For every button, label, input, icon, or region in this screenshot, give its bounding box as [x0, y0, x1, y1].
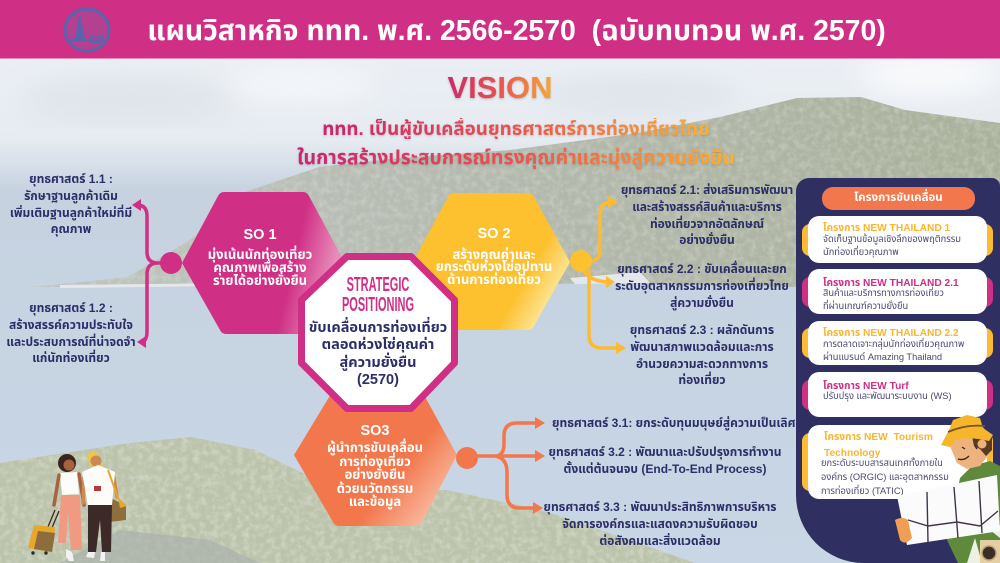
strategy text 2.1: และสร้างสรรค์สินค้าและบริการ	[632, 200, 782, 214]
strategy text 2.1	[621, 183, 793, 247]
face	[950, 436, 992, 469]
strategy text 2.1: ท่องเที่ยวจากอัตลักษณ์	[650, 217, 764, 231]
hand	[895, 518, 912, 543]
project card 5: การท่องเที่ยว (TATIC)	[821, 486, 904, 496]
text: สร้างคุณค่าและ	[452, 246, 536, 262]
project card 4: โครงการ NEW Turf	[823, 380, 909, 392]
strategy text 3.3: ยุทธศาสตร์ 3.3 : พัฒนาประสิทธิภาพการบริหาร	[543, 500, 777, 514]
vision statement: ททท. เป็นผู้ขับเคลื่อนยุทธศาสตร์การท่องเที่ยวไทย	[322, 118, 710, 139]
vision statement	[297, 118, 735, 170]
strategy text 2.3: ท่องเที่ยว	[678, 373, 726, 387]
strategy text 3.3	[543, 500, 777, 548]
strategy text 1.1: ยุทธศาสตร์ 1.1 :	[29, 172, 113, 186]
project card 5: Technology	[824, 448, 880, 458]
shirt	[947, 461, 1000, 563]
strategy text 2.3: อำนวยความสะดวกทางการ	[636, 357, 768, 371]
strategy text 1.2	[6, 301, 136, 365]
SO1 text: SO 1	[243, 227, 277, 243]
strategy text 2.3	[630, 323, 774, 387]
heading: VISION: VISION	[447, 70, 553, 105]
text: รายได้อย่างยั่งยืน	[213, 272, 307, 288]
hat	[941, 415, 993, 447]
icon: couple of travellers	[28, 452, 127, 561]
text: การท่องเที่ยว	[339, 454, 411, 468]
hexagon: SO1	[160, 192, 342, 334]
strategy text 2.2	[615, 260, 789, 310]
strategy text 2.3: พัฒนาสภาพแวดล้อมและการ	[630, 340, 774, 354]
suitcase	[45, 510, 59, 535]
logo	[64, 8, 110, 52]
connector arrows: SO3	[477, 417, 545, 514]
text: อย่างยั่งยืน	[345, 467, 405, 482]
connector node	[570, 250, 592, 272]
project card 5: โครงการ NEW Tourism	[824, 432, 933, 443]
project card 4: ปรับปรุง และพัฒนาระบบงาน (WS)	[823, 390, 952, 400]
strategic positioning text: สู่ความยั่งยืน	[340, 354, 416, 370]
SO3 text: SO3	[360, 423, 390, 439]
connector node	[456, 447, 478, 469]
text: มุ่งเน้นนักท่องเที่ยว	[208, 246, 312, 262]
project card 1: นักท่องเที่ยวคุณภาพ	[823, 247, 899, 257]
strategy text 1.1: เพิ่มเติมฐานลูกค้าใหม่ที่มี	[10, 206, 132, 220]
project card 5	[802, 425, 993, 499]
strategy text 3.3: จัดการองค์กรและแสดงความรับผิดชอบ	[562, 517, 758, 531]
text: คุณภาพเพื่อสร้าง	[213, 260, 306, 274]
strategy text 3.2	[549, 445, 781, 476]
strategy text 1.1	[10, 172, 132, 236]
hexagon: SO2	[416, 193, 592, 330]
strategic positioning heading: POSITIONING	[342, 294, 414, 316]
project card 3: การตลาดเจาะกลุ่มนักท่องเที่ยวคุณภาพ	[823, 338, 964, 348]
project card 2: สินค้าและบริการทางการท่องเที่ยว	[823, 288, 944, 298]
strategy text 1.2: ยุทธศาสตร์ 1.2 :	[29, 301, 113, 315]
project card 3: ผ่านแบรนด์ Amazing Thailand	[823, 352, 942, 362]
strategy text 1.2: แก่นักท่องเที่ยว	[32, 351, 110, 365]
strategy text 2.2: ระดับอุตสาหกรรมการท่องเที่ยวไทย	[615, 279, 789, 293]
project card 5: องค์กร (ORGIC) และอุตสาหกรรม	[821, 472, 949, 482]
project card 2	[802, 269, 993, 314]
strategy text 1.2: และประสบการณ์ที่น่าจดจำ	[6, 335, 136, 349]
project card 4	[802, 372, 993, 417]
strategy text 1.1: คุณภาพ	[51, 222, 91, 236]
strategy text 3.2: ยุทธศาสตร์ 3.2 : พัฒนาและปรับปรุงการทำงาน	[549, 445, 781, 459]
strategy text 2.2: ยุทธศาสตร์ 2.2 : ขับเคลื่อนและยก	[617, 262, 787, 276]
map	[897, 475, 1000, 545]
header banner	[0, 0, 1000, 59]
project card 1: โครงการ NEW THAILAND 1	[823, 223, 950, 234]
text: ด้านการท่องเที่ยว	[447, 272, 541, 286]
panel heading pill	[822, 187, 975, 210]
strategy text 3.2: ตั้งแต่ต้นจนจบ (End-To-End Process)	[564, 462, 766, 476]
strategy text 2.1: อย่างยั่งยืน	[679, 233, 735, 247]
strategy text 1.1: รักษาฐานลูกค้าเดิม	[24, 189, 118, 203]
project card 1: จัดเก็บฐานข้อมูลเชิงลึกของพฤติกรรม	[823, 234, 961, 244]
project card 2: โครงการ NEW THAILAND 2.1	[823, 278, 959, 288]
project card 3: โครงการ NEW THAILAND 2.2	[823, 328, 959, 338]
woman	[58, 454, 76, 472]
strategic positioning text: ขับเคลื่อนการท่องเที่ยว	[309, 320, 447, 336]
strategy text 2.3: ยุทธศาสตร์ 2.3 : ผลักดันการ	[630, 323, 774, 337]
text: ยกระดับห่วงโซ่อุปทาน	[436, 259, 552, 274]
project card 5: ยกระดับระบบสารสนเทศทั้งภายใน	[821, 458, 943, 468]
octagon: strategic positioning	[298, 253, 458, 412]
project card 2: ที่ผ่านเกณฑ์ความยั่งยืน	[823, 301, 908, 311]
title: แผนวิสาหกิจ ททท. พ.ศ. 2566-2570 (ฉบับทบทวน พ.ศ. 2570)	[147, 15, 886, 47]
project card 1	[802, 216, 993, 263]
icon: traveller with map	[895, 415, 1000, 563]
connector node	[160, 252, 182, 274]
strategy text 1.2: สร้างสรรค์ความประทับใจ	[9, 318, 133, 332]
text: ผู้นำการขับเคลื่อน	[327, 440, 423, 455]
man	[87, 452, 104, 470]
panel heading pill: โครงการขับเคลื่อน	[854, 192, 943, 204]
strategic positioning heading	[342, 274, 414, 316]
strategy text 2.1: ยุทธศาสตร์ 2.1: ส่งเสริมการพัฒนา	[621, 183, 793, 197]
strategy text 2.2: สู่ความยั่งยืน	[670, 296, 734, 310]
strategic positioning text: ตลอดห่วงโซ่คุณค่า	[322, 337, 434, 353]
strategy text 3.3: ต่อสังคมและสิ่งแวดล้อม	[599, 534, 721, 548]
camera	[980, 540, 1000, 563]
strategy text 3.1: ยุทธศาสตร์ 3.1: ยกระดับทุนมนุษย์สู่ความเป็นเลิศ	[552, 416, 796, 430]
hexagon: SO3	[294, 396, 478, 526]
panel: driving projects	[796, 178, 1000, 563]
strategic positioning text: (2570)	[357, 372, 399, 388]
strategic positioning text	[309, 316, 447, 388]
connector arrows: SO2	[582, 196, 626, 354]
text: และข้อมูล	[349, 494, 401, 509]
text: ด้วยนวัตกรรม	[337, 480, 413, 496]
project card 3	[802, 321, 993, 365]
SO2 text: SO 2	[477, 226, 511, 242]
vision statement: ในการสร้างประสบการณ์ทรงคุณค่าและมุ่งสู่ความยั่งยืน	[297, 146, 735, 168]
connector arrows: SO1	[132, 199, 160, 348]
strategic positioning heading: STRATEGIC	[347, 274, 409, 296]
